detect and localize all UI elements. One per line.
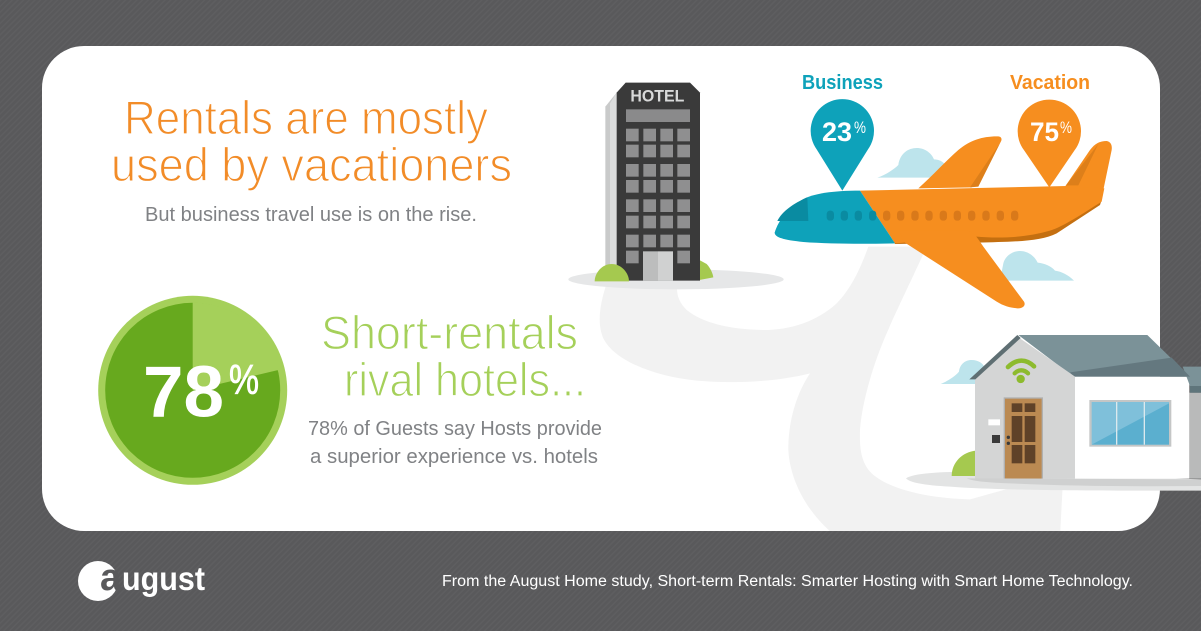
text: guests statement: a superior experience vs. hotels (310, 446, 598, 468)
main roof (1018, 335, 1190, 377)
footer source: From the August Home study, Short-term Rentals: Smarter Hosting with Smart Home Technology. (442, 573, 1133, 590)
logo: August: ugust (122, 560, 205, 597)
icon: hotel: HOTEL (630, 87, 684, 106)
label: vacation: Vacation (1010, 72, 1090, 94)
lower wing (899, 231, 1025, 308)
house number (988, 419, 1000, 425)
house base shadow (967, 478, 1201, 486)
cloud (941, 360, 985, 384)
house ground shadow (906, 472, 1201, 491)
right wall section (1189, 393, 1201, 479)
heading: short-rentals: Short-rentals (321, 306, 578, 359)
keypad (992, 435, 1000, 443)
heading: short-rentals: rival hotels... (344, 353, 586, 406)
value: 23 percent: % (854, 118, 866, 137)
icon: hotel (568, 83, 784, 289)
wifi icon (1008, 361, 1034, 382)
route ribbon from hotel to house (600, 247, 1063, 537)
pie value: 78 (143, 352, 224, 432)
window (1089, 400, 1171, 447)
value: 23 percent (822, 117, 866, 147)
icon: airplane (775, 99, 1112, 308)
cabin windows (827, 211, 876, 221)
fuselage teal (775, 191, 895, 244)
subtitle: But business travel use is on the rise. (145, 204, 477, 226)
bush (952, 451, 980, 476)
gable wall (975, 338, 1075, 479)
text: guests statement: 78% of Guests say Hosts provide (308, 418, 602, 440)
text: guests statement (308, 418, 602, 468)
heading: short-rentals (321, 306, 586, 406)
far roof (1183, 367, 1201, 386)
title (111, 91, 512, 191)
icon: house (906, 335, 1201, 491)
upper wing (918, 136, 1002, 188)
value: 23 percent: 23 (822, 117, 852, 147)
label: business: Business (802, 72, 883, 94)
pie percent sign: % (229, 356, 259, 403)
logo: August (78, 557, 205, 601)
business pin (811, 99, 874, 191)
logo: August: a (100, 557, 122, 599)
value: 75 percent: 75 (1030, 117, 1059, 147)
fuselage shadow (890, 200, 1102, 244)
tail fin (1065, 141, 1112, 190)
panel: white card (42, 46, 1160, 531)
vacation pin (1018, 100, 1081, 187)
door (1004, 397, 1043, 479)
pie chart: 78 percent (98, 296, 287, 485)
title: Rentals are mostly (124, 91, 488, 144)
value: 75 percent: % (1060, 118, 1072, 137)
fuselage orange (860, 186, 1104, 243)
icon: clouds near plane (877, 148, 1074, 281)
white wing (1075, 377, 1189, 479)
title: used by vacationers (111, 138, 512, 191)
